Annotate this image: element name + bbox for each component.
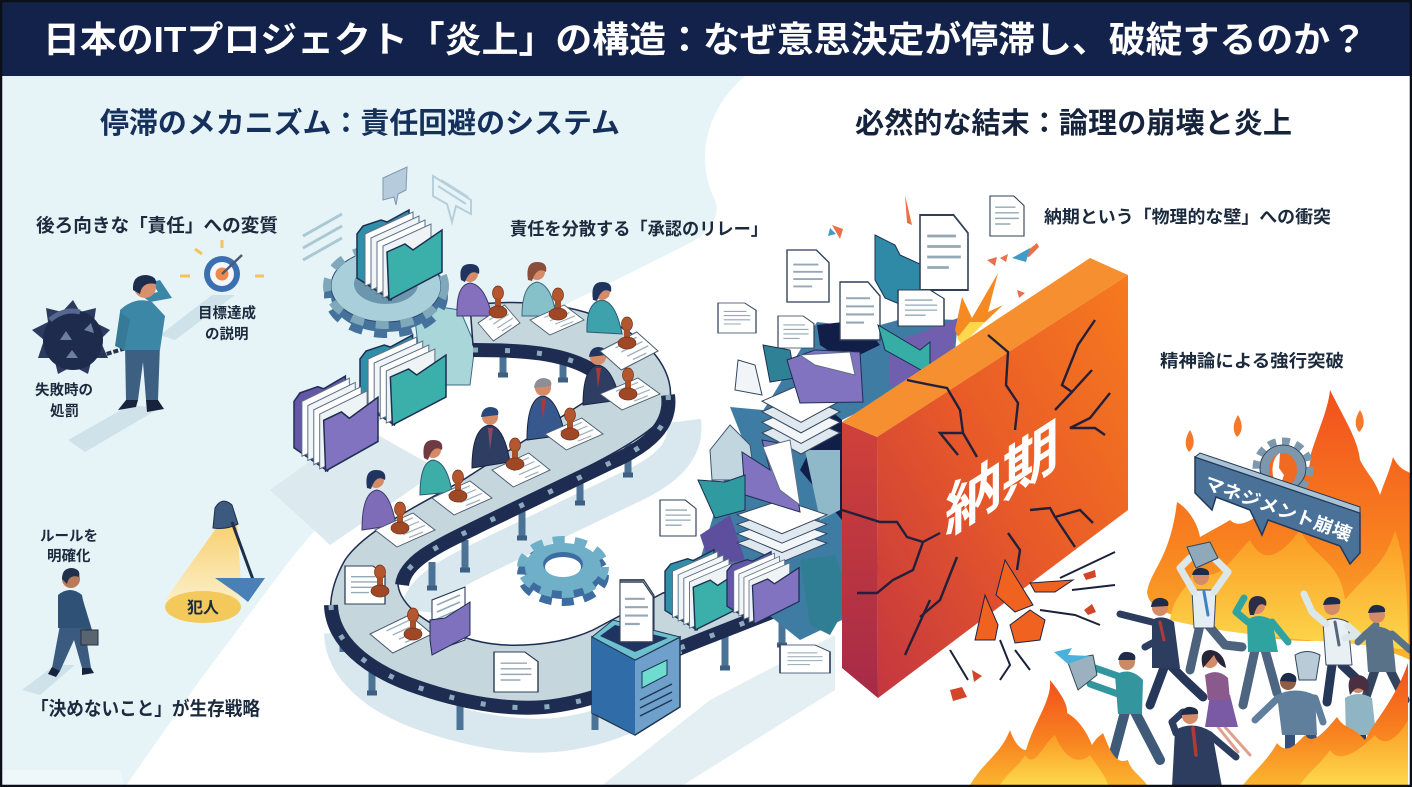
wall face [877, 275, 1128, 698]
person: purple woman [1202, 650, 1250, 755]
person: shirt man [1304, 594, 1360, 702]
ground crack [975, 560, 1073, 643]
sign: management collapse [1195, 441, 1360, 564]
approvers on the belt [345, 262, 660, 692]
label: target explanation: の説明 [205, 325, 248, 343]
person: teal woman running [1236, 596, 1288, 705]
label: backward responsibility: 後ろ向きな「責任」への変質 [36, 215, 278, 236]
heading: left section: 停滞のメカニズム：責任回避のシステム [100, 106, 620, 140]
person: grey back man [1255, 673, 1323, 770]
label: target explanation: 目標達成 [198, 304, 256, 322]
deadline wall [842, 258, 1128, 701]
flames behind crowd [1147, 390, 1410, 660]
belt legs [343, 352, 782, 730]
flames in the foreground [970, 663, 1408, 785]
exploding documents pile [660, 195, 1039, 673]
person: navy suit [583, 347, 620, 405]
icon: shadows [68, 295, 235, 452]
heading: right section: 必然的な結末：論理の崩壊と炎上 [855, 107, 1292, 140]
label: punishment: 失敗時の [35, 381, 93, 399]
label: clarify rules: ルールを [40, 528, 98, 545]
person: navy suit 2 [472, 407, 510, 468]
wall top [842, 258, 1128, 437]
label: physical wall: 納期という「物理的な壁」への衝突 [1044, 207, 1331, 227]
person: grey suit [1358, 605, 1410, 700]
panel: survival strategy [22, 501, 265, 720]
person: bottom suit man [1172, 707, 1236, 787]
scanner machine [592, 580, 680, 735]
person: teal jacket woman [587, 282, 622, 334]
person: small woman [1345, 675, 1376, 760]
belt surface [331, 302, 800, 712]
icon: bucket on ground [1295, 652, 1320, 680]
wall side [842, 422, 878, 698]
impact burst [955, 273, 1003, 342]
panicking crowd [1054, 542, 1410, 787]
person: pointing man [1120, 598, 1203, 705]
stacks [762, 384, 840, 454]
icon: central gear [521, 540, 605, 602]
label: approval relay: 責任を分散する「承認のリレー」 [510, 219, 768, 239]
person: grey haired suit [527, 378, 565, 440]
figure: worried man [115, 275, 172, 412]
person: purple woman 2 [362, 470, 396, 530]
folder upright on belt [430, 587, 470, 655]
person: teal sweater woman [420, 440, 452, 495]
person: water bucket man [1054, 648, 1160, 768]
label: survival strategy: 「決めないこと」が生存戦略 [31, 697, 260, 720]
cracks [842, 320, 1110, 655]
icon: spotlight on culprit [165, 501, 265, 623]
title bar: 日本のITプロジェクト「炎上」の構造：なぜ意思決定が停滞し、破綻するのか？ [43, 19, 1367, 60]
icon: target [180, 240, 264, 292]
person: purple woman [457, 264, 492, 316]
label: spiritual push: 精神論による強行突破 [1160, 351, 1344, 371]
label: punishment: 処罰 [50, 403, 79, 420]
label: clarify rules: 明確化 [47, 548, 91, 565]
label: management collapse: マネジメント崩壊 [1202, 473, 1354, 545]
wall label: 納期 [945, 409, 1059, 550]
shards [700, 318, 958, 640]
icon: speech bubbles [303, 167, 471, 260]
purple folder [787, 350, 863, 403]
icon: spiked ball and chain [32, 300, 126, 374]
label: culprit: 犯人 [187, 598, 219, 617]
lower folders [742, 440, 800, 512]
folder stacks left [294, 335, 446, 471]
person: teal woman [522, 262, 556, 316]
title bar [0, 0, 1412, 76]
icon: broken gear [1256, 441, 1310, 495]
conveyor belt [331, 302, 800, 736]
person: bucket thrower [1180, 542, 1242, 670]
belt rails [473, 350, 595, 372]
icon: gear with folders at top [303, 167, 475, 385]
figure: walking man with briefcase [22, 568, 98, 695]
upper folders [875, 235, 933, 318]
panel: shift of responsibility [32, 215, 278, 452]
